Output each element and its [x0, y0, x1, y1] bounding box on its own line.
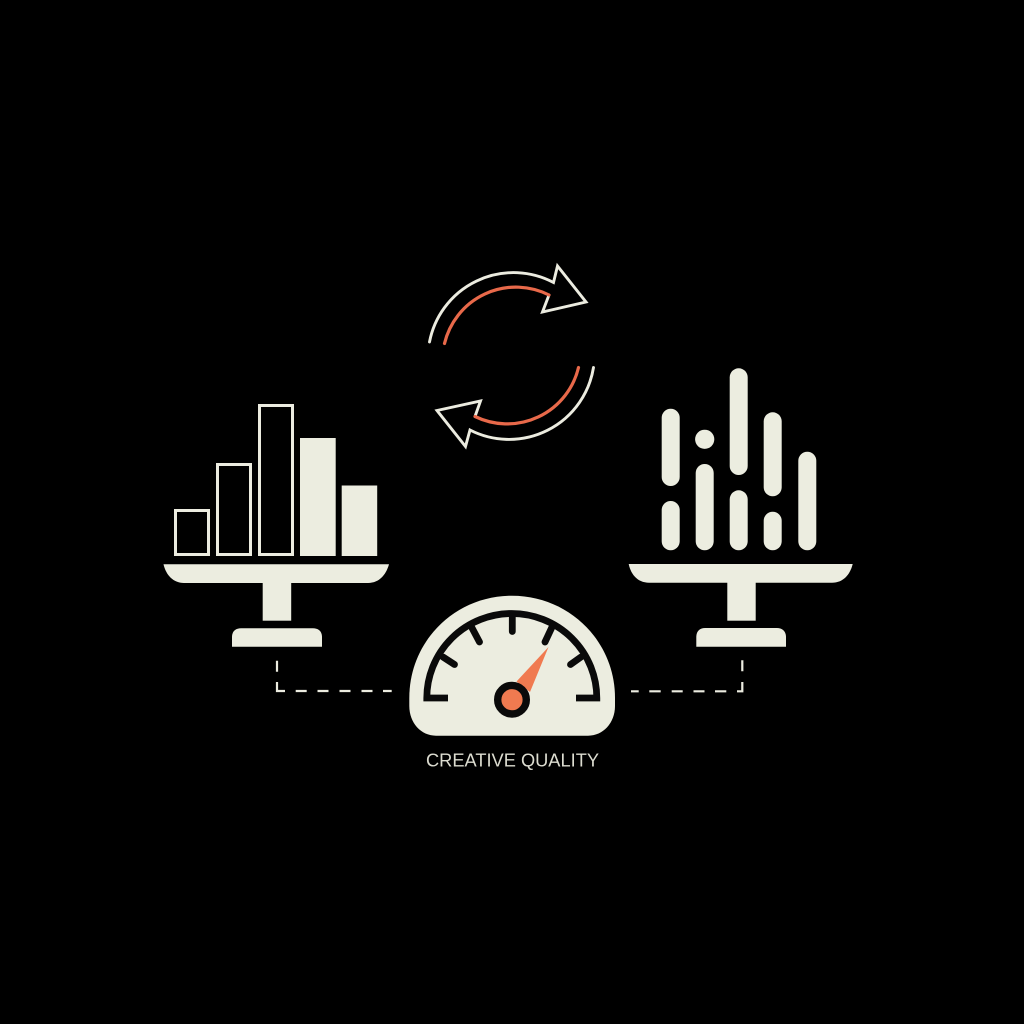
lower arrow	[437, 368, 594, 446]
gauge body	[409, 596, 615, 736]
dashed connector left	[277, 661, 392, 691]
gauge dial	[427, 614, 597, 698]
left stand	[164, 564, 389, 647]
left scale: structured bar chart	[164, 406, 389, 647]
solid bars	[300, 438, 377, 556]
gauge hub	[498, 685, 526, 714]
gauge label: CREATIVE QUALITY	[426, 750, 599, 770]
right stand	[629, 564, 853, 647]
right scale: fragmented pill chart	[629, 368, 853, 647]
gauge	[409, 596, 615, 736]
pills	[662, 368, 816, 550]
outlined bars	[176, 406, 292, 554]
gauge needle	[516, 647, 548, 692]
dashed connector right	[631, 660, 742, 691]
upper arrow	[430, 266, 586, 344]
icon: cycle arrows	[430, 266, 594, 446]
